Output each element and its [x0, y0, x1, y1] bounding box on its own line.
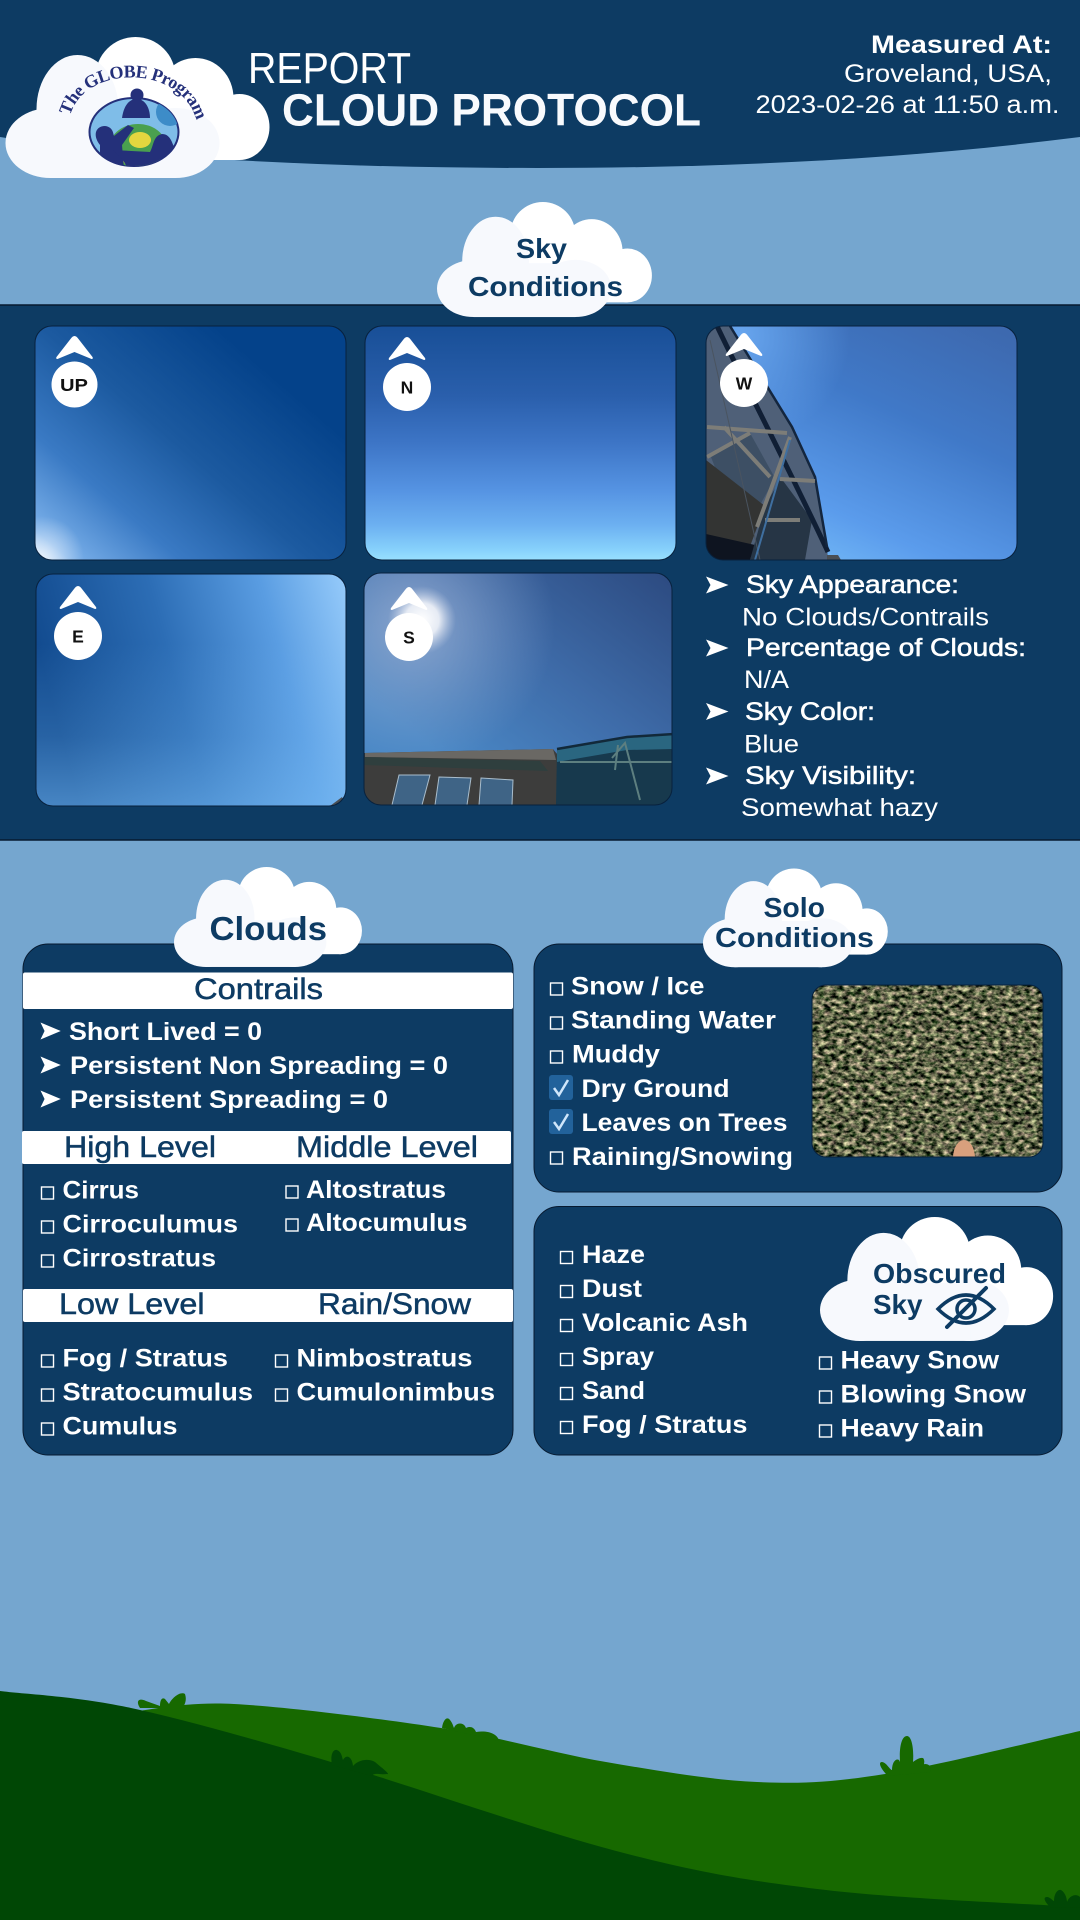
photo: west — [706, 326, 1017, 560]
heading: sky conditions — [437, 202, 652, 317]
light green hill with tufts — [130, 1693, 1080, 1920]
sky attributes list: N/A — [744, 666, 789, 694]
low level list — [42, 1344, 253, 1440]
heading: sky conditions: Sky — [516, 233, 567, 264]
contrails bar: Contrails — [194, 973, 323, 1006]
low level list: Stratocumulus — [62, 1378, 253, 1406]
obscured heading cloud — [820, 1217, 1053, 1341]
heading: solo conditions — [703, 868, 888, 967]
contrails list: Persistent Spreading = 0 — [70, 1086, 388, 1114]
obscured left list: Sand — [582, 1377, 645, 1405]
direction marker: south — [385, 587, 433, 661]
sky attributes list: No Clouds/Contrails — [742, 604, 989, 632]
direction marker: up — [52, 336, 98, 408]
direction marker: east: E — [72, 626, 84, 646]
solo conditions list: Dry Ground — [582, 1075, 730, 1103]
high and middle level bar — [22, 1131, 511, 1164]
direction marker: north — [383, 337, 431, 411]
middle level list: Altostratus — [306, 1176, 446, 1204]
high and middle level bar: High Level — [64, 1131, 216, 1164]
solo conditions list: Raining/Snowing — [572, 1143, 793, 1171]
logo globe — [90, 88, 184, 170]
low level and rain snow bar: Rain/Snow — [318, 1288, 471, 1321]
photo: south — [364, 573, 673, 805]
solo conditions list: Leaves on Trees — [582, 1109, 788, 1137]
heading: solo conditions: Solo — [764, 892, 825, 923]
solo conditions list: Standing Water — [571, 1006, 776, 1034]
contrails bar — [23, 972, 513, 1009]
solo conditions list — [549, 972, 793, 1171]
ground photo — [812, 985, 1043, 1176]
title — [248, 44, 701, 136]
heading: sky conditions: Conditions — [468, 271, 623, 302]
direction marker: west: W — [736, 374, 753, 394]
obscured heading cloud: Sky — [873, 1289, 923, 1320]
logo arc text: The GLOBE Program — [58, 66, 204, 120]
obscured left list: Spray — [582, 1343, 654, 1371]
photo: east — [36, 574, 346, 806]
sky attributes list: Blue — [744, 730, 799, 758]
obscured right list: Heavy Snow — [840, 1346, 1000, 1374]
high and middle level bar: Middle Level — [296, 1131, 478, 1164]
sky attributes list: Sky Visibility: — [745, 762, 916, 790]
sky attributes list: Sky Color: — [745, 698, 875, 726]
direction marker: north: N — [401, 378, 413, 398]
rain and snow list — [276, 1344, 495, 1406]
heading: solo conditions: Conditions — [715, 922, 874, 953]
obscured left list: Fog / Stratus — [582, 1411, 748, 1439]
high level list — [42, 1176, 238, 1272]
direction marker: east — [54, 586, 102, 660]
rain and snow list: Nimbostratus — [296, 1344, 472, 1372]
panel: obscured sky — [534, 1206, 1062, 1455]
heading: clouds — [174, 867, 362, 967]
high level list: Cirrus — [62, 1176, 139, 1204]
high level list: Cirroculumus — [62, 1210, 238, 1238]
low level list: Fog / Stratus — [62, 1344, 228, 1372]
middle level list: Altocumulus — [306, 1209, 468, 1237]
sky attributes list: Somewhat hazy — [741, 794, 939, 822]
low level list: Cumulus — [62, 1412, 178, 1440]
checked box: dry ground — [549, 1075, 573, 1100]
measurement info: Measured At: — [871, 31, 1052, 59]
obscured right list: Blowing Snow — [840, 1380, 1027, 1408]
sky attributes list — [706, 571, 1026, 822]
sky attributes list: Sky Appearance: — [746, 571, 959, 599]
obscured right list: Heavy Rain — [840, 1414, 984, 1442]
heading: clouds: Clouds — [210, 910, 327, 947]
panel: clouds — [22, 944, 513, 1455]
checked box: leaves on trees — [549, 1109, 573, 1134]
low level and rain snow bar — [23, 1288, 513, 1322]
direction marker: south: S — [403, 628, 415, 648]
contrails list — [40, 1018, 448, 1114]
direction marker: up: UP — [60, 375, 88, 395]
title: CLOUD PROTOCOL — [282, 84, 701, 136]
high level list: Cirrostratus — [62, 1244, 216, 1272]
header banner — [0, 0, 1080, 168]
icon: crossed eye — [938, 1288, 994, 1327]
photo: north — [365, 326, 676, 560]
solo conditions list: Snow / Ice — [571, 972, 705, 1000]
obscured left list — [560, 1241, 748, 1439]
contrails list: Persistent Non Spreading = 0 — [70, 1052, 448, 1080]
obscured left list: Haze — [582, 1241, 645, 1269]
panel: solo conditions — [534, 944, 1062, 1192]
obscured heading cloud: Obscured — [873, 1258, 1006, 1289]
direction marker: west — [720, 333, 768, 407]
obscured left list: Dust — [582, 1275, 643, 1303]
low level and rain snow bar: Low Level — [59, 1288, 204, 1321]
rain and snow list: Cumulonimbus — [296, 1378, 495, 1406]
middle level list — [286, 1176, 468, 1237]
measurement info — [756, 31, 1060, 119]
dark green hill with tufts — [0, 1691, 1080, 1920]
contrails list: Short Lived = 0 — [69, 1018, 262, 1046]
sky attributes list: Percentage of Clouds: — [746, 634, 1026, 662]
panel: sky conditions — [0, 305, 1080, 840]
measurement info: 2023-02-26 at 11:50 a.m. — [756, 91, 1060, 119]
obscured left list: Volcanic Ash — [582, 1309, 748, 1337]
title: REPORT — [248, 44, 411, 93]
measurement info: Groveland, USA, — [844, 60, 1052, 88]
obscured right list — [820, 1346, 1027, 1442]
solo conditions list: Muddy — [572, 1040, 660, 1068]
logo cloud — [6, 37, 270, 178]
photo: up — [35, 326, 346, 560]
